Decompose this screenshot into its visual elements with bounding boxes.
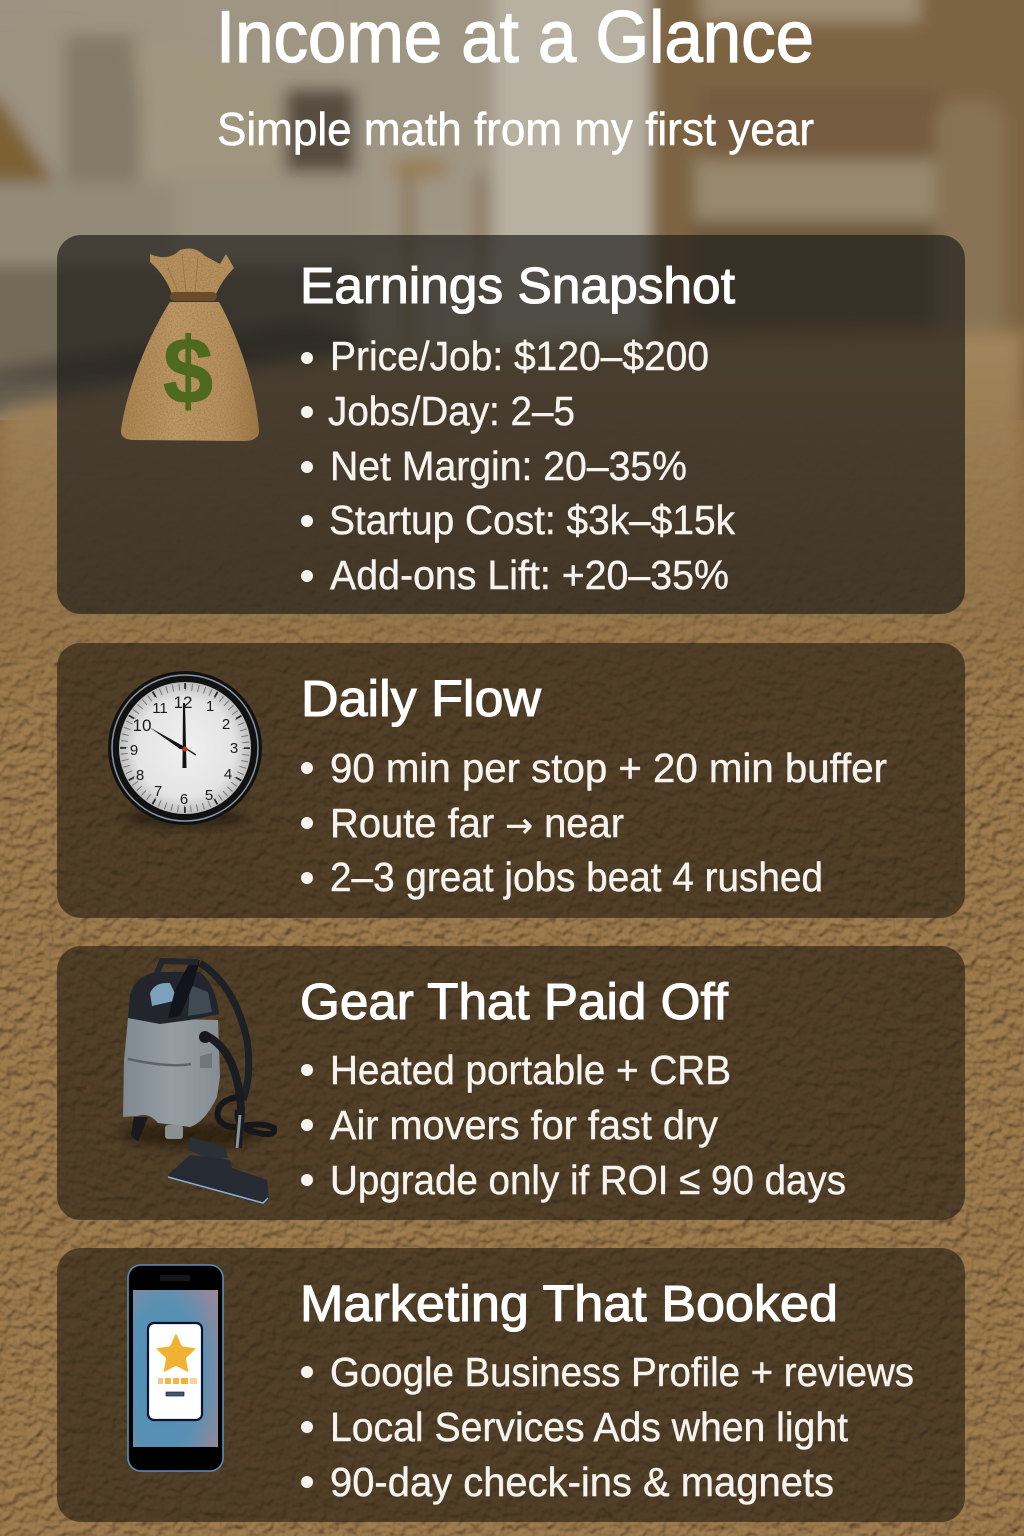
panel: gear that paid off [57, 946, 965, 1220]
list: marketing: Local Services Ads when light [330, 1404, 849, 1450]
list: marketing: 90-day check-ins & magnets [330, 1459, 834, 1505]
clock numbers: 7 [154, 783, 162, 800]
list: earnings: Price/Job: $120–$200 [330, 333, 709, 379]
panel: earnings snapshot [57, 235, 965, 614]
heading: gear: Gear That Paid Off [300, 973, 729, 1030]
dollar sign: $ [163, 318, 213, 423]
clock numbers: 3 [230, 740, 238, 757]
list: daily flow [301, 745, 887, 900]
list: earnings: Add-ons Lift: +20–35% [330, 552, 729, 598]
list: gear: Upgrade only if ROI ≤ 90 days [330, 1157, 846, 1203]
heading: earnings snapshot: Earnings Snapshot [300, 257, 735, 314]
clock numbers: 6 [180, 791, 188, 808]
panel: marketing that booked [57, 1248, 965, 1522]
clock numbers: 1 [206, 698, 214, 715]
clock numbers: 11 [152, 700, 168, 717]
list: marketing [301, 1349, 914, 1505]
panel background: gear [57, 946, 965, 1220]
list: earnings: Jobs/Day: 2–5 [328, 388, 575, 434]
clock numbers: 5 [205, 787, 213, 804]
clock numbers: 2 [222, 716, 230, 733]
clock numbers: 12 [174, 693, 192, 712]
panel background: earnings [57, 235, 965, 614]
icon: money bag [121, 248, 259, 441]
panel background: marketing [57, 1248, 965, 1522]
list: gear: Heated portable + CRB [330, 1047, 731, 1093]
clock numbers: 9 [130, 742, 138, 759]
heading: daily flow: Daily Flow [301, 670, 541, 727]
star [158, 1335, 194, 1371]
list: earnings: Net Margin: 20–35% [330, 443, 687, 489]
list: daily flow: 90 min per stop + 20 min buffer [330, 745, 887, 791]
list: earnings: Startup Cost: $3k–$15k [329, 497, 735, 543]
list: gear [301, 1047, 846, 1203]
list: daily flow: Route far → near [330, 800, 624, 846]
list: daily flow: 2–3 great jobs beat 4 rushed [330, 854, 823, 900]
clock numbers: 4 [224, 766, 232, 783]
clock numbers: 10 [133, 716, 151, 735]
list: marketing: Google Business Profile + reviews [330, 1349, 914, 1395]
panel: daily flow [57, 643, 965, 918]
icon: phone with star review [128, 1265, 223, 1471]
icon: carpet extractor vacuum [120, 960, 274, 1204]
clock numbers [130, 693, 238, 808]
subtitle: Simple math from my first year [217, 103, 814, 155]
icon: wall clock [108, 671, 262, 828]
list: gear: Air movers for fast dry [330, 1102, 718, 1148]
panel background: daily flow [57, 643, 965, 918]
heading: marketing: Marketing That Booked [300, 1275, 838, 1332]
clock numbers: 8 [136, 767, 144, 784]
list: earnings [301, 333, 735, 598]
